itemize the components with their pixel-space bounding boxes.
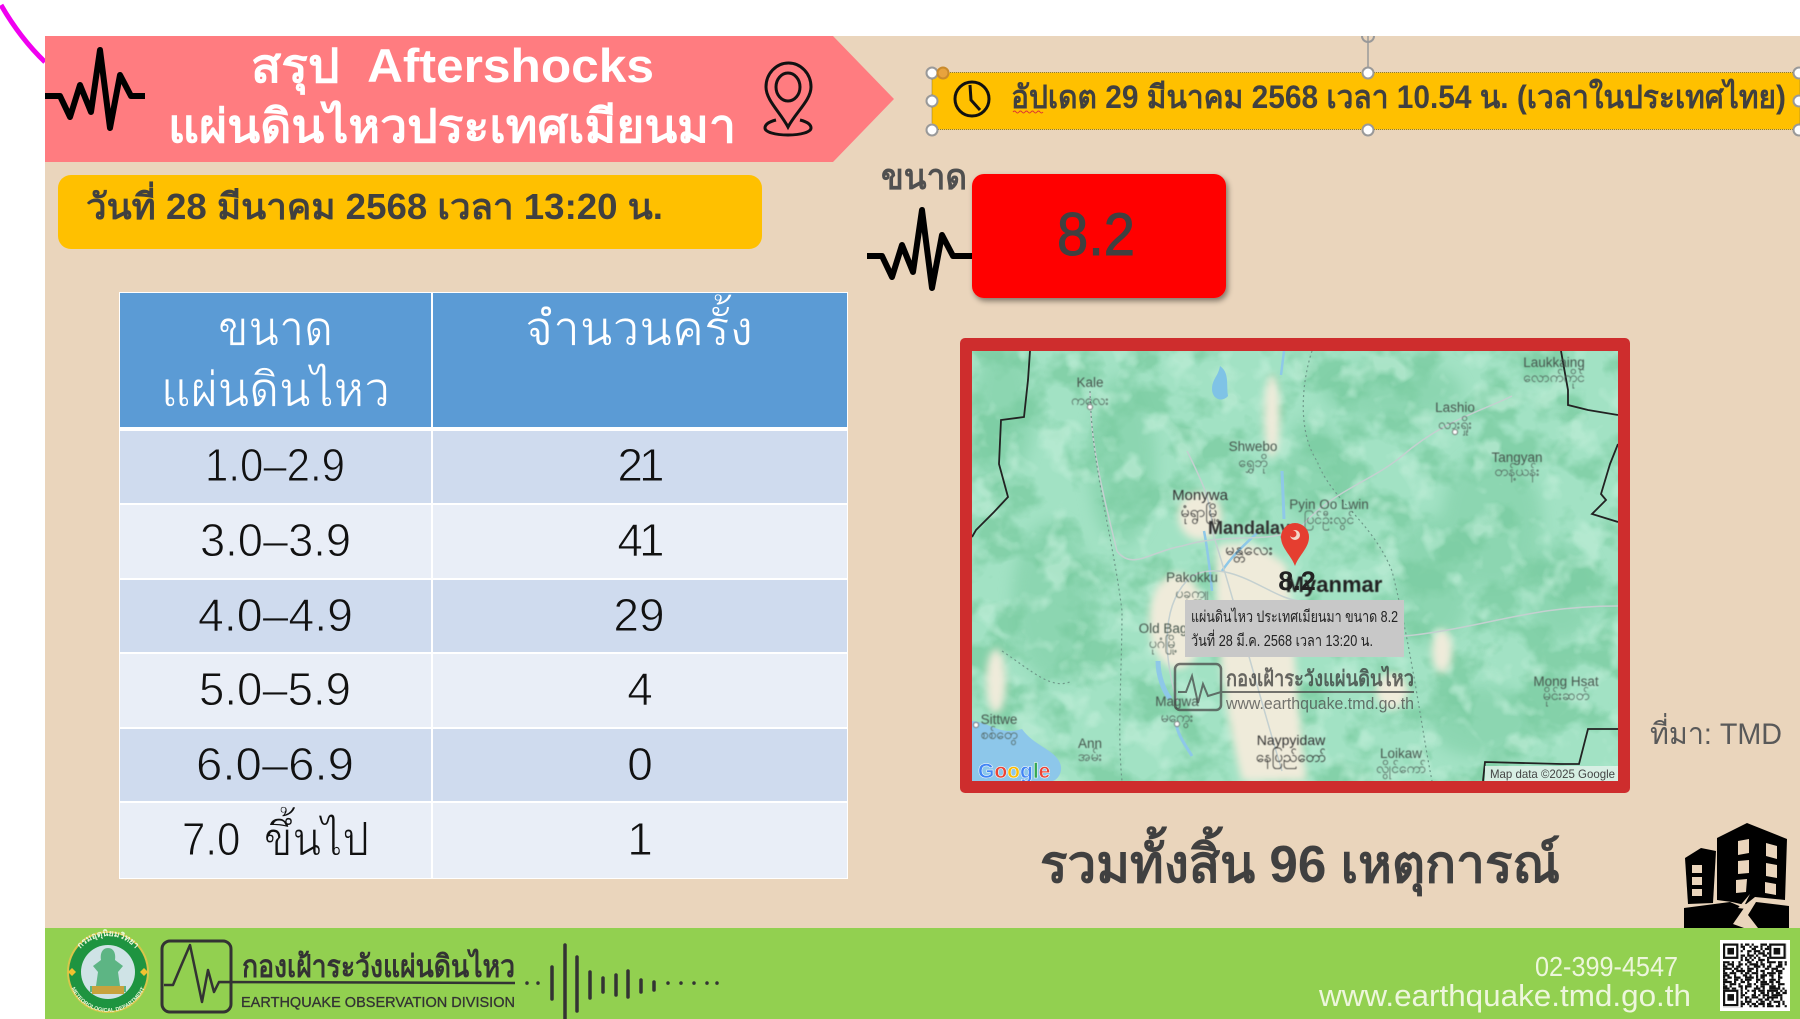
icon: seismic pulse: [45, 50, 145, 128]
map place labels: စစ်တွေ: [981, 726, 1018, 745]
map place labels: Ann: [1078, 736, 1102, 751]
selection handles: [926, 36, 1800, 136]
map place labels: Laukkaing: [1523, 355, 1585, 370]
map place labels: Mong Hsat: [1533, 674, 1599, 689]
map place labels: မိုင်းဆတ်: [1543, 687, 1590, 706]
total events: รวมทั้งสิ้น 96 เหตุการณ์: [1040, 826, 1560, 897]
map place labels: ပခုက္ကူ: [1175, 585, 1209, 604]
table: aftershock counts: [119, 292, 848, 879]
map attribution: Map data ©2025 Google: [1490, 767, 1615, 781]
table rows: 4.0–4.9: [198, 589, 353, 641]
map place labels: Monywa: [1172, 487, 1229, 504]
earthquake location marker: 8.2: [1278, 566, 1316, 596]
magnitude label: ขนาด: [881, 156, 967, 197]
table header: [120, 293, 847, 427]
division logo: EARTHQUAKE OBSERVATION DIVISION: [241, 994, 515, 1011]
map place labels: Shwebo: [1229, 439, 1277, 454]
map place labels: Mandalay: [1208, 518, 1290, 538]
google logo: Google: [978, 760, 1050, 783]
icon: clock: [955, 82, 989, 116]
footer bar: [45, 928, 1800, 1019]
map place labels: Kale: [1076, 375, 1104, 390]
map place labels: ကလေး: [1071, 392, 1109, 408]
map terrain: [972, 341, 1618, 781]
map place labels: Naypyidaw: [1257, 732, 1326, 748]
roads: [1090, 391, 1618, 771]
table rows: 1.0–2.9: [205, 439, 345, 491]
map place labels: မန္တလေး: [1225, 540, 1273, 563]
table rows: 5.0–5.9: [199, 663, 351, 715]
division logo: กองเฝ้าระวังแผ่นดินไหว: [242, 948, 515, 984]
date pill: [58, 175, 762, 249]
website: www.earthquake.tmd.go.th: [1318, 978, 1691, 1013]
map place labels: နေပြည်တော်: [1256, 747, 1326, 769]
earthquake location marker: [1279, 523, 1315, 590]
division logo: [162, 941, 515, 1012]
map place labels: ပုဂံမြို့: [1149, 635, 1177, 654]
update bar with selection handles: [926, 36, 1800, 136]
table rows: 6.0–6.9: [196, 738, 354, 790]
table rows: 3.0–3.9: [200, 514, 351, 566]
phone number: 02-399-4547: [1535, 951, 1678, 982]
table rows: 0: [627, 738, 653, 790]
earthquake tooltip: แผ่นดินไหว ประเทศเมียนมา ขนาด 8.2: [1191, 607, 1398, 626]
map place labels: မုံရွာမြို့: [1180, 502, 1220, 524]
country borders: [972, 351, 1618, 781]
map place labels: Lashio: [1435, 400, 1475, 415]
icon: cracked buildings: [1684, 823, 1789, 928]
title text line 2: แผ่นดินไหวประเทศเมียนมา: [168, 100, 736, 152]
icon: seismic pulse beside magnitude: [867, 210, 972, 288]
watermark logo: กองเฝ้าระวังแผ่นดินไหว: [1226, 665, 1414, 691]
sea: [972, 721, 1061, 781]
date pill: วันที่ 28 มีนาคม 2568 เวลา 13:20 น.: [86, 181, 663, 227]
map place labels: Myanmar: [1286, 572, 1383, 597]
department emblem: METEOROLOGICAL DEPARTMENT: [72, 986, 144, 1012]
table rows: 7.0 ขึ้นไป: [182, 806, 369, 865]
map place labels: လားရှိုး: [1438, 416, 1472, 435]
source note: ที่มา: TMD: [1650, 713, 1782, 751]
table rows: 4: [627, 663, 653, 715]
table header: จำนวนครั้ง: [525, 294, 753, 356]
table rows: 41: [617, 514, 663, 566]
table header: ขนาด: [218, 303, 333, 356]
map place labels: Pakokku: [1166, 570, 1218, 585]
map panel: [960, 338, 1630, 793]
title banner: [45, 36, 894, 162]
QR code: [1720, 940, 1790, 1011]
magnitude box: 8.2: [1057, 201, 1135, 268]
map place labels: Pyin Oo Lwin: [1289, 497, 1369, 512]
map place labels: Tangyan: [1491, 450, 1543, 465]
map place labels: လောက်ကိုင်: [1523, 369, 1585, 388]
table rows: [120, 431, 847, 878]
map place labels: Loikaw: [1380, 746, 1422, 761]
department emblem: กรมอุตุนิยมวิทยา: [78, 929, 138, 948]
earthquake tooltip: วันที่ 28 มี.ค. 2568 เวลา 13:20 น.: [1191, 629, 1373, 650]
map place labels: ပြင်ဦးလွင်: [1304, 511, 1354, 530]
map place labels: မကွေး: [1161, 709, 1194, 728]
map place labels: တန့်ယန်း: [1494, 463, 1540, 482]
table rows: 1: [627, 813, 653, 865]
icon: location pin: [765, 63, 811, 135]
magnitude box: [972, 174, 1226, 298]
watermark logo: [1175, 664, 1414, 713]
magenta selection stroke: [1, 5, 45, 62]
lake and rivers: [1212, 366, 1228, 400]
map place labels: ရွှေဘို: [1238, 454, 1268, 473]
map place labels: [974, 355, 1599, 779]
sound wave mark: [527, 945, 717, 1019]
department emblem: [67, 929, 149, 1013]
table rows: 29: [613, 589, 665, 641]
watermark logo: www.earthquake.tmd.go.th: [1225, 694, 1414, 713]
map place labels: Old Bag: [1139, 621, 1187, 636]
map place labels: Sittwe: [981, 712, 1017, 727]
table rows: 21: [617, 439, 663, 491]
earthquake tooltip: [1185, 600, 1404, 657]
table header: แผ่นดินไหว: [161, 362, 390, 417]
title text line 1: สรุป Aftershocks: [251, 39, 654, 95]
map place labels: အမ်း: [1078, 748, 1103, 764]
map place labels: Magwa: [1155, 694, 1199, 709]
map place labels: လွိုင်ကော်: [1376, 760, 1426, 779]
internal borders: [1002, 351, 1432, 781]
